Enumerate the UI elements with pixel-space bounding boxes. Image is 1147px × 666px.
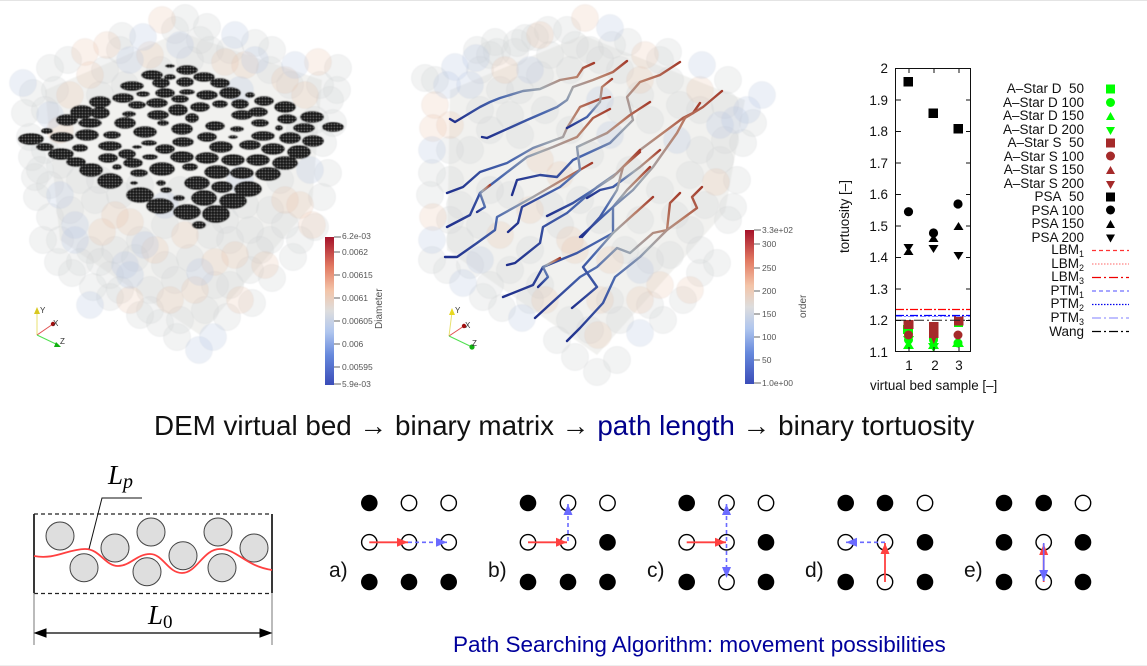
- chart legend: PSA 150: [1031, 216, 1084, 231]
- icon: axes triad left: [34, 306, 65, 347]
- chart: tortuosity scatter: [837, 61, 997, 393]
- colorbar: order: 300: [762, 239, 776, 249]
- tick labels: 1.9: [869, 93, 888, 108]
- chart legend: PSA 200: [1031, 230, 1084, 245]
- axes and ticks: [896, 68, 971, 352]
- icon: axes triad left: Z: [60, 337, 65, 346]
- panel e: dead end: [964, 495, 1091, 590]
- colorbar: Diameter: 6.2e-03: [342, 231, 371, 241]
- chart: tortuosity scatter: 2: [931, 358, 939, 373]
- tick labels: 2: [881, 61, 888, 76]
- chart legend: PTM: [1050, 310, 1079, 325]
- panel c: branch up and down: c): [647, 559, 664, 582]
- chart legend: 1: [1079, 290, 1084, 300]
- label Lp: L: [108, 460, 123, 490]
- chart legend: A–Star D 200: [1003, 122, 1084, 137]
- sphere packing: [412, 4, 776, 386]
- icon: axes triad right: Z: [472, 339, 477, 348]
- icon: axes triad right: [449, 306, 477, 350]
- chart legend: A–Star S 200: [1004, 176, 1084, 191]
- sphere packing: [10, 4, 352, 364]
- colorbar: order: 250: [762, 263, 776, 273]
- label L0: 0: [163, 612, 173, 633]
- chart legend: A–Star S 150: [1004, 162, 1084, 177]
- colorbar: order: order: [798, 294, 809, 318]
- colorbar: order: 1.0e+00: [762, 378, 793, 388]
- red flow path: [34, 549, 272, 573]
- chart legend: A–Star D 100: [1003, 95, 1084, 110]
- panel a: straight move: a): [329, 559, 348, 582]
- chart legend: 3: [1079, 317, 1084, 327]
- panel b: turn up: [488, 495, 616, 590]
- panel d: up then left: d): [805, 559, 824, 582]
- colorbar: order: 100: [762, 332, 776, 342]
- tick labels: 1.7: [869, 156, 888, 171]
- chart legend: PSA 50: [1034, 189, 1084, 204]
- chart legend: A–Star S 100: [1004, 149, 1084, 164]
- caption: path searching algorithm: Path Searching Algorithm: movement possibilities: [453, 632, 946, 657]
- chart legend: LBM: [1051, 269, 1079, 284]
- title: process chain: DEM virtual bed → binary matrix → path length → binary tortuosity: [154, 410, 974, 441]
- chart: tortuosity scatter: 1: [905, 358, 913, 373]
- span arrow: [35, 629, 271, 637]
- colorbar: order: 200: [762, 286, 776, 296]
- chart legend: PSA 100: [1031, 203, 1084, 218]
- particles: [46, 518, 268, 586]
- colorbar: order: [745, 225, 809, 388]
- tick labels: 1.6: [869, 187, 888, 202]
- tick labels: 1.5: [869, 219, 888, 234]
- icon: axes triad right: Y: [455, 306, 461, 315]
- chart legend: PTM: [1050, 283, 1079, 298]
- label L0: L: [148, 600, 163, 630]
- colorbar: Diameter: 0.0061: [342, 293, 368, 303]
- chart legend: LBM: [1051, 256, 1079, 271]
- colorbar: Diameter: 5.9e-03: [342, 379, 371, 389]
- tick labels: 1.4: [869, 250, 889, 265]
- panel b: turn up: b): [488, 559, 507, 582]
- panel: packed bed with flow paths: [412, 4, 776, 386]
- chart: tortuosity scatter: 3: [955, 358, 963, 373]
- chart legend: A–Star D 50: [1007, 81, 1084, 96]
- chart legend: LBM: [1051, 242, 1079, 257]
- black slice discs: [18, 64, 344, 229]
- chart legend: PTM: [1050, 296, 1079, 311]
- tick labels: 1.1: [869, 345, 888, 360]
- tick labels: 1.2: [869, 313, 888, 328]
- icon: axes triad right: X: [465, 321, 471, 330]
- chart: tortuosity scatter: virtual bed sample [–]: [870, 378, 997, 393]
- colorbar: Diameter: Diameter: [374, 288, 385, 329]
- colorbar: Diameter: 0.006: [342, 339, 364, 349]
- chart legend: A–Star D 150: [1003, 108, 1084, 123]
- chart legend: A–Star S 50: [1007, 135, 1084, 150]
- colorbar: order: 150: [762, 309, 776, 319]
- tick labels: [869, 61, 889, 360]
- chart legend: Wang: [1049, 324, 1084, 339]
- chart legend: [1003, 81, 1129, 339]
- chart legend: 3: [1079, 276, 1084, 286]
- label Lp: p: [121, 471, 133, 493]
- colorbar: order: 50: [762, 355, 772, 365]
- colorbar: Diameter: 0.0062: [342, 247, 368, 257]
- panel: DEM packed bed with slice: [10, 4, 352, 364]
- reference lines: [896, 310, 971, 320]
- chart legend: 2: [1079, 303, 1084, 313]
- schematic: tortuous path through particles: [34, 460, 272, 645]
- icon: axes triad left: Y: [40, 306, 46, 315]
- icon: axes triad left: X: [53, 319, 59, 328]
- chart legend: 1: [1079, 249, 1084, 259]
- tick labels: 1.8: [869, 124, 888, 139]
- chart legend: 2: [1079, 263, 1084, 273]
- colorbar: Diameter: [325, 231, 385, 389]
- panel e: dead end: e): [964, 559, 983, 582]
- flow paths: [445, 61, 722, 341]
- axis titles: tortuosity [–]: [837, 180, 852, 253]
- plot markers: [903, 77, 964, 352]
- colorbar: Diameter: 0.00595: [342, 362, 373, 372]
- leader line: [89, 498, 142, 549]
- panel c: branch up and down: [647, 495, 774, 590]
- panel d: up then left: [805, 495, 933, 590]
- colorbar: Diameter: 0.00605: [342, 316, 373, 326]
- colorbar: order: 3.3e+02: [762, 225, 793, 235]
- colorbar: Diameter: 0.00615: [342, 270, 373, 280]
- tick labels: 1.3: [869, 282, 888, 297]
- panel a: straight move: [329, 495, 457, 590]
